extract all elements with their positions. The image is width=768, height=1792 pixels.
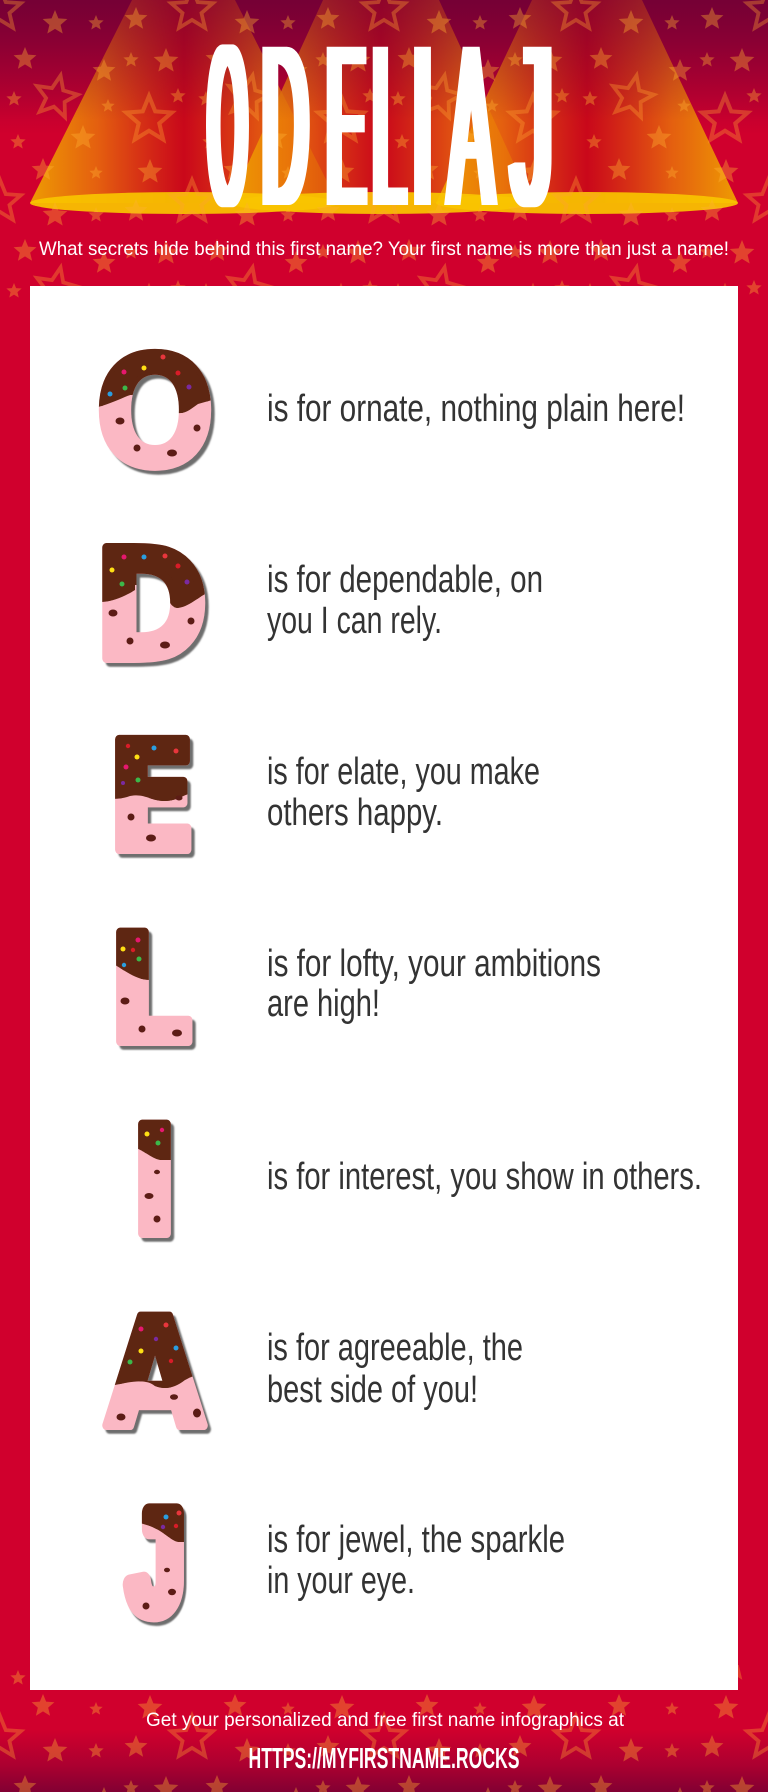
title: O: [209, 0, 246, 255]
icon: chocolate letter A: A: [105, 1287, 205, 1461]
icon: chocolate letter D: D: [94, 518, 208, 695]
text: J line: is for jewel, the sparkle: [267, 1519, 565, 1561]
title: J: [511, 0, 553, 254]
text: A line: best side of you!: [267, 1369, 478, 1411]
icon: chocolate letter E: E: [107, 710, 197, 886]
text: A line: [267, 1327, 523, 1411]
icon: chocolate letter O: O: [94, 323, 216, 504]
icon: chocolate letter O: [98, 348, 216, 476]
icon: chocolate letter A: A: [105, 1287, 205, 1461]
icon: chocolate letter I: [138, 1120, 176, 1243]
icon: chocolate letter J: J: [128, 1484, 184, 1642]
text: J line: [267, 1519, 565, 1602]
spotlight cones: [0, 0, 768, 214]
text: D line: you I can rely.: [267, 600, 442, 642]
title: A: [449, 0, 493, 254]
icon: chocolate letter E: [115, 734, 196, 859]
panel: white card: [30, 286, 738, 1690]
text: J line: in your eye.: [267, 1560, 415, 1602]
title: I: [412, 0, 433, 255]
icon: chocolate letter D: D: [94, 518, 208, 695]
text: E line: is for elate, you make: [267, 751, 540, 793]
footer text: Get your personalized and free first name infographics at: [146, 1710, 625, 1731]
icon: chocolate letter L: L: [108, 903, 192, 1078]
title: L: [373, 0, 405, 254]
subtitle: What secrets hide behind this first name? Your first name is more than just a name!: [39, 238, 729, 260]
icon: chocolate letter I: I: [130, 1095, 179, 1270]
icon: chocolate letter A: [102, 1312, 212, 1435]
text: E line: [267, 751, 540, 834]
icon: chocolate letter I: I: [130, 1095, 179, 1270]
icon: chocolate letter L: [116, 928, 197, 1051]
footer url: HTTPS://MYFIRSTNAME.ROCKS: [248, 1743, 520, 1775]
title: D: [262, 0, 308, 254]
icon: chocolate letter E: E: [107, 710, 197, 886]
icon: chocolate letter J: J: [128, 1484, 184, 1642]
title: [209, 0, 553, 255]
text: E line: others happy.: [267, 792, 443, 834]
text: L line: are high!: [267, 983, 380, 1025]
star pattern bottom: [0, 1665, 768, 1792]
text: D line: is for dependable, on: [267, 559, 543, 601]
text: A line: is for agreeable, the: [267, 1327, 523, 1369]
star pattern top: [0, 0, 768, 300]
icon: chocolate letter O: O: [94, 323, 216, 504]
title: E: [327, 0, 365, 254]
text: L line: is for lofty, your ambitions: [267, 943, 601, 985]
text: L line: [267, 943, 601, 1025]
icon: chocolate letter D: [102, 543, 210, 668]
icon: chocolate letter L: L: [108, 903, 192, 1078]
text: D line: [267, 559, 543, 642]
